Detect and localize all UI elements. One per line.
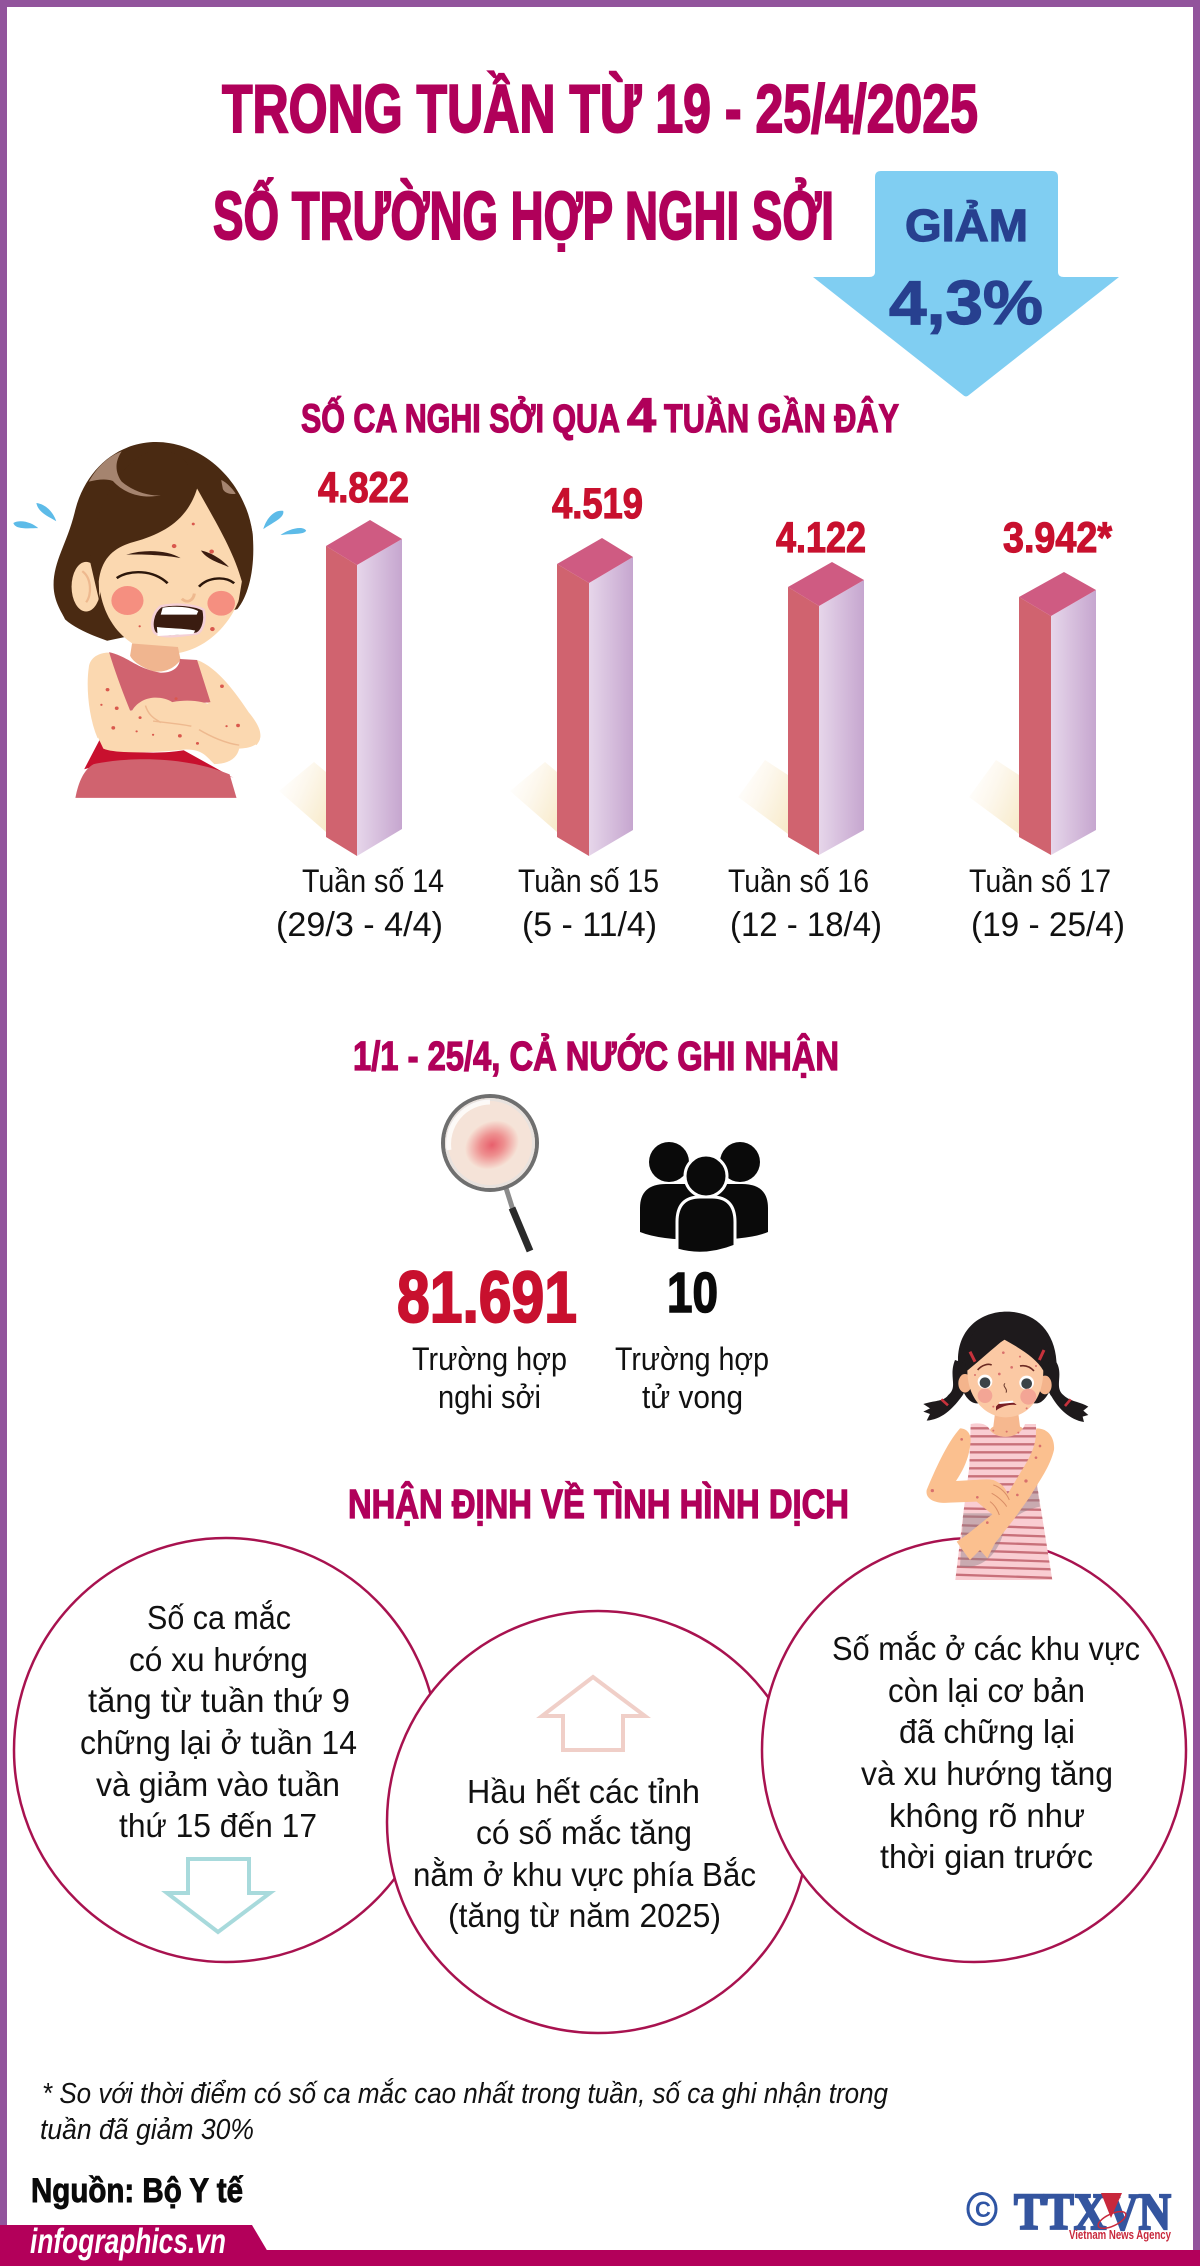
week labels: Tuần số 14 <box>302 863 444 899</box>
footnote <box>40 2077 888 2146</box>
panel: circle middle, north: nằm ở khu vực phía Bắc <box>413 1856 756 1893</box>
panel: circle right, other regions: không rõ như <box>889 1797 1085 1834</box>
panel: circle right, other regions: và xu hướng tăng <box>861 1755 1113 1792</box>
stat: deaths: tử vong <box>642 1379 743 1415</box>
icon: magnifier over rash <box>443 1096 537 1251</box>
panel: circle left, trend: chững lại ở tuần 14 <box>80 1724 357 1761</box>
stat: suspected cases <box>397 1258 577 1415</box>
arrow: down <box>167 1859 270 1932</box>
icon: three people <box>640 1142 768 1253</box>
week labels: (29/3 - 4/4) <box>276 906 443 944</box>
bar chart: weekly suspected measles cases <box>276 464 1125 944</box>
bar: week 15: 4.519 <box>552 480 643 528</box>
stat: deaths: Trường hợp <box>615 1341 769 1377</box>
panel: circle middle, north: (tăng từ năm 2025) <box>448 1897 721 1934</box>
panel: circle left, trend: Số ca mắc <box>147 1599 291 1636</box>
stat: suspected cases: Trường hợp <box>412 1341 567 1377</box>
heading: assessment: NHẬN ĐỊNH VỀ TÌNH HÌNH DỊCH <box>348 1481 849 1527</box>
illustration: girl with rash scratching <box>13 442 306 798</box>
stat: suspected cases: nghi sởi <box>438 1379 541 1415</box>
week labels: (19 - 25/4) <box>971 906 1125 944</box>
panel: circle right, other regions: Số mắc ở các khu vực <box>832 1630 1140 1667</box>
logo: TTXVN <box>968 2184 1172 2242</box>
bar: week 17: 3.942* <box>1003 514 1112 562</box>
panel: circle right, other regions: đã chững lại <box>899 1713 1075 1750</box>
bar: week 16: 4.122 <box>776 514 866 562</box>
arrow: up <box>542 1677 645 1750</box>
week labels <box>276 863 1125 944</box>
week labels: (12 - 18/4) <box>730 906 882 944</box>
panel: circle middle, north: Hầu hết các tỉnh <box>467 1773 700 1810</box>
footer bar with site name <box>0 2222 1200 2266</box>
stat: deaths: 10 <box>667 1261 718 1325</box>
bar: week 16 <box>738 514 866 855</box>
week labels: Tuần số 17 <box>969 863 1111 899</box>
heading: cases over four weeks <box>301 390 899 443</box>
heading: cases over four weeks: 4 <box>627 390 656 443</box>
title <box>213 70 978 254</box>
footer bar with site name: infographics.vn <box>30 2222 226 2261</box>
week labels: Tuần số 16 <box>728 863 869 899</box>
stat: deaths <box>615 1261 769 1415</box>
heading: cases over four weeks: TUẦN GẦN ĐÂY <box>664 395 899 441</box>
week labels: (5 - 11/4) <box>522 906 657 944</box>
panel: circle left, trend: thứ 15 đến 17 <box>119 1807 317 1844</box>
panel: circle left, trend: tăng từ tuần thứ 9 <box>88 1682 350 1719</box>
bar: week 14 <box>279 464 409 856</box>
panel: circle left, trend: và giảm vào tuần <box>96 1766 340 1803</box>
title: SỐ TRƯỜNG HỢP NGHI SỞI <box>213 177 834 254</box>
panel: circle left, trend <box>14 1538 438 1962</box>
heading: national total: 1/1 - 25/4, CẢ NƯỚC GHI NHẬN <box>353 1033 839 1079</box>
bar: week 17 <box>969 514 1112 855</box>
panel: circle middle, north <box>387 1611 809 2033</box>
logo: TTXVN: TTXVN <box>1014 2184 1171 2241</box>
panel: circle left, trend: có xu hướng <box>129 1641 308 1678</box>
panel: circle right, other regions: còn lại cơ bản <box>888 1672 1085 1709</box>
source: Nguồn: Bộ Y tế <box>31 2172 243 2210</box>
footnote: * So với thời điểm có số ca mắc cao nhất trong tuần, số ca ghi nhận trong <box>42 2077 888 2110</box>
heading: cases over four weeks: SỐ CA NGHI SỞI QUA <box>301 395 620 441</box>
panel: circle right, other regions <box>762 1538 1186 1962</box>
footnote: tuần đã giảm 30% <box>40 2114 254 2146</box>
panel: circle middle, north: có số mắc tăng <box>476 1814 692 1851</box>
callout: down arrow, decrease 4.3% <box>813 171 1119 396</box>
callout: down arrow, decrease 4.3%: 4,3% <box>889 269 1043 338</box>
bar: week 15 <box>510 480 643 856</box>
panel: circle right, other regions: thời gian trước <box>880 1838 1093 1875</box>
logo: TTXVN: C <box>975 2197 991 2222</box>
bar: week 14: 4.822 <box>318 464 409 512</box>
stat: suspected cases: 81.691 <box>397 1258 577 1338</box>
week labels: Tuần số 15 <box>518 863 659 899</box>
illustration: girl with braids and rash <box>923 1312 1088 1580</box>
callout: down arrow, decrease 4.3%: GIẢM <box>905 200 1028 251</box>
